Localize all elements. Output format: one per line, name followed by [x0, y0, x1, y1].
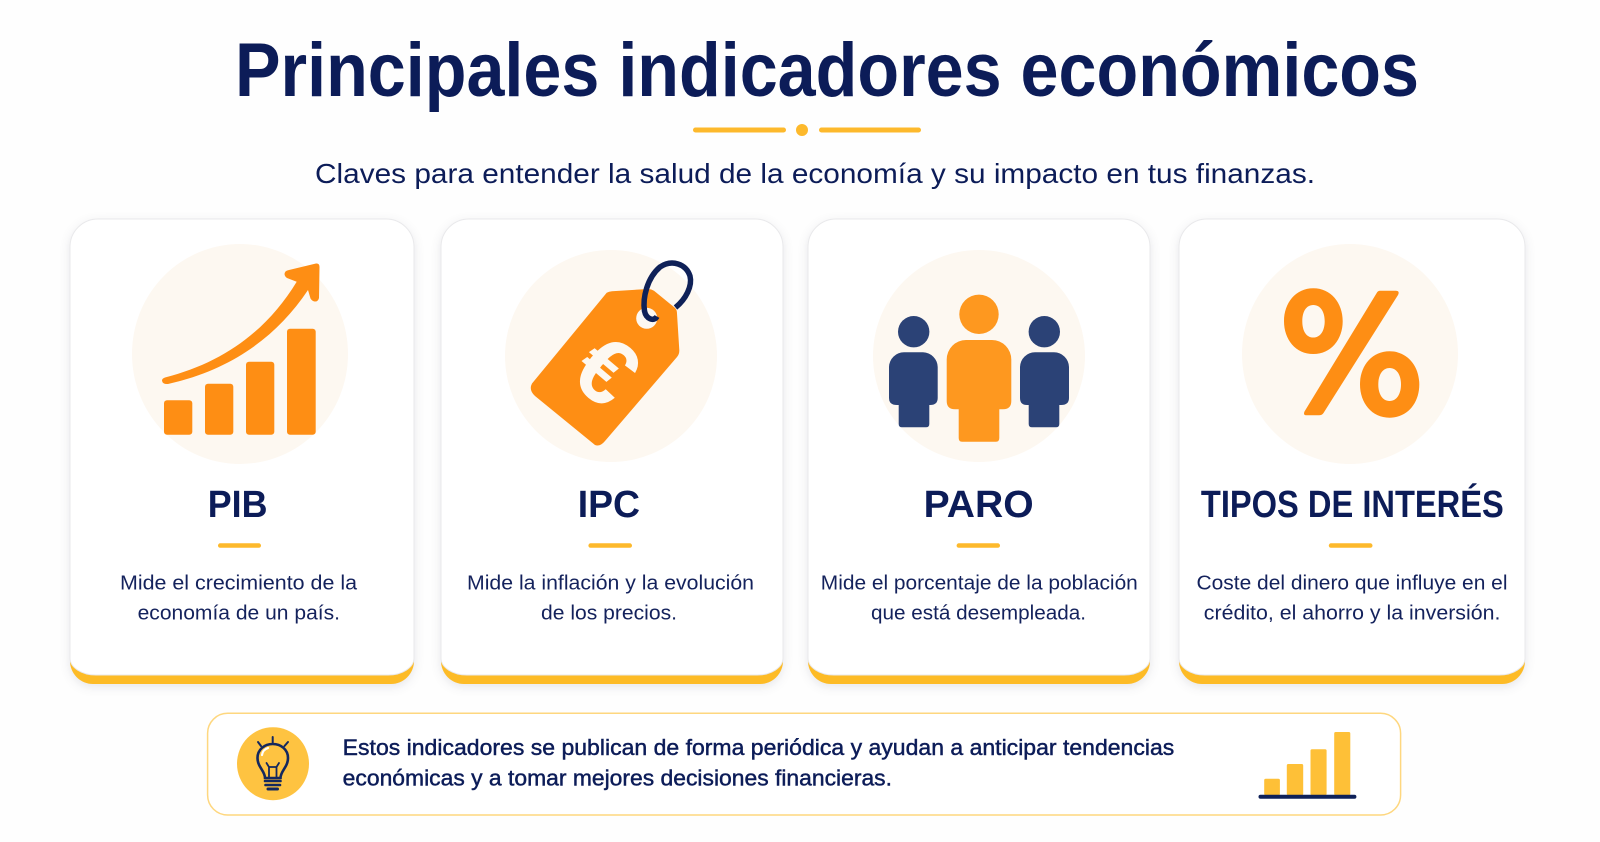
icon: light bulb	[237, 727, 309, 800]
description PARO	[821, 571, 1138, 624]
icon: small bar chart	[1258, 732, 1356, 799]
icon: price tag with euro: €	[554, 315, 658, 427]
icon: three people	[889, 295, 1069, 442]
description IPC	[467, 571, 754, 624]
description TIPOS	[1196, 571, 1508, 624]
heading PARO: PARO	[924, 484, 1034, 526]
accent PIB	[218, 543, 261, 548]
description TIPOS: crédito, el ahorro y la inversión.	[1204, 601, 1500, 624]
accent IPC	[588, 543, 632, 548]
panel: PIB	[70, 219, 414, 684]
icon: percent symbol	[1284, 288, 1419, 418]
title: Principales indicadores económicos	[235, 28, 1419, 113]
description IPC: de los precios.	[541, 601, 677, 624]
icon circle TIPOS	[1242, 244, 1458, 464]
accent TIPOS	[1329, 543, 1372, 548]
card background PIB	[70, 219, 414, 684]
description PIB: Mide el crecimiento de la	[120, 571, 358, 594]
card background IPC	[441, 219, 783, 684]
callout text: económicas y a tomar mejores decisiones financieras.	[343, 766, 892, 790]
icon circle IPC	[505, 250, 717, 462]
subtitle: Claves para entender la salud de la economía y su impacto en tus finanzas.	[315, 158, 1315, 189]
description PARO: Mide el porcentaje de la población	[821, 571, 1138, 594]
accent PARO	[957, 543, 1000, 548]
panel: PARO	[808, 219, 1150, 684]
description IPC: Mide la inflación y la evolución	[467, 571, 754, 594]
heading PIB: PIB	[208, 484, 268, 526]
card background PARO	[808, 219, 1150, 684]
panel: TIPOS DE INTERÉS	[1179, 219, 1525, 684]
callout text: Estos indicadores se publican de forma periódica y ayudan a anticipar tendencias	[343, 735, 1174, 760]
description PIB: economía de un país.	[138, 601, 340, 624]
icon: price tag with euro	[531, 263, 691, 446]
title divider	[693, 124, 921, 136]
panel: IPC	[441, 219, 783, 684]
heading TIPOS: TIPOS DE INTERÉS	[1201, 482, 1504, 526]
heading IPC: IPC	[578, 484, 640, 526]
icon: bar chart with rising arrow	[162, 263, 320, 435]
description PIB	[120, 571, 358, 624]
description PARO: que está desempleada.	[871, 601, 1086, 624]
icon circle PIB	[132, 244, 348, 464]
icon circle PARO	[873, 250, 1085, 462]
callout	[208, 713, 1401, 815]
description TIPOS: Coste del dinero que influye en el	[1196, 571, 1508, 594]
card background TIPOS	[1179, 219, 1525, 684]
callout text	[343, 735, 1174, 790]
callout box	[208, 713, 1401, 815]
